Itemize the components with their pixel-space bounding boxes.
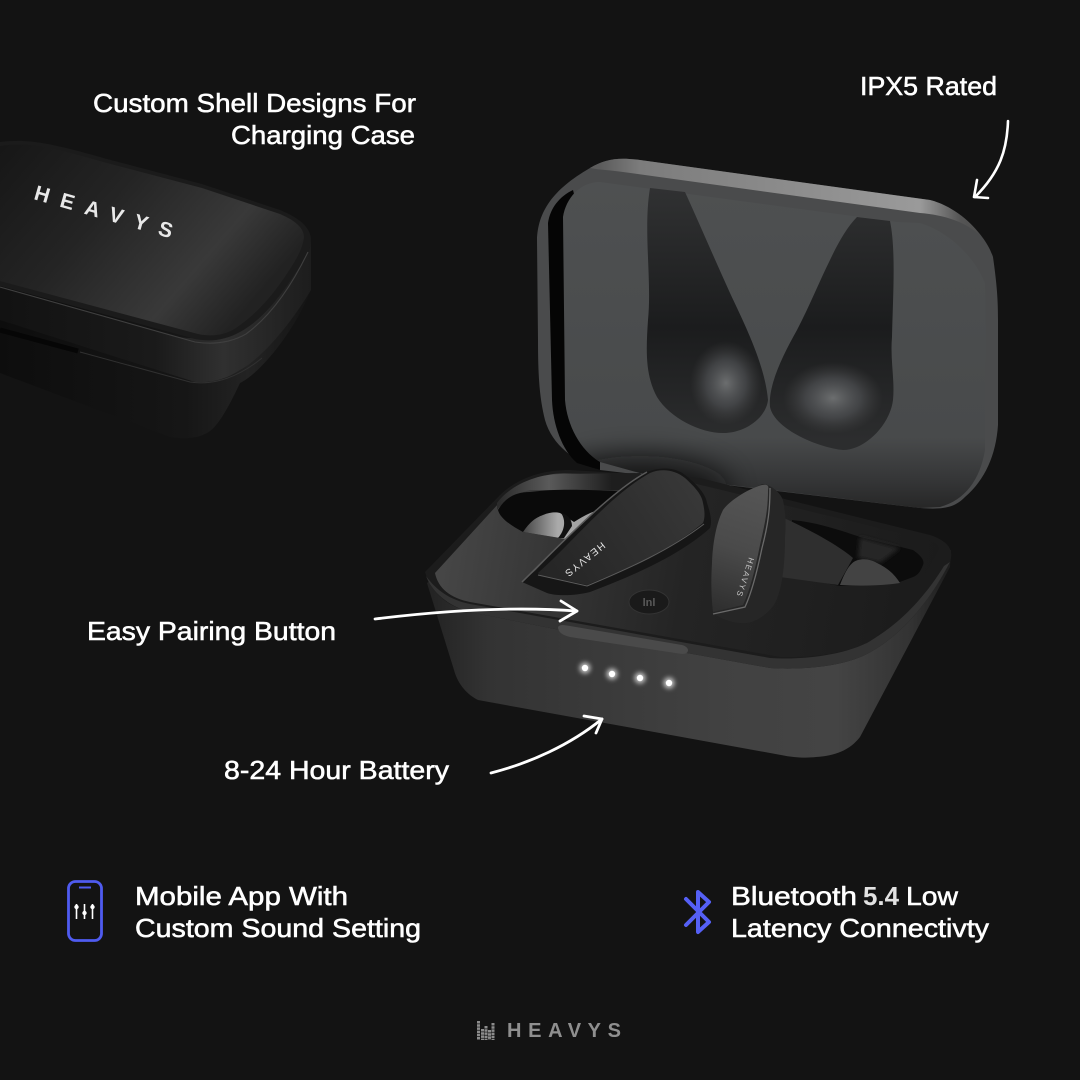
- right earbud well: [780, 518, 923, 586]
- arrow: easy pairing: [375, 601, 577, 621]
- lid lower shadow: [586, 442, 736, 486]
- text: mobile app: [135, 881, 421, 943]
- product: closed charging case: [0, 141, 311, 438]
- icon: pairing button: [629, 590, 669, 614]
- earbud right: [711, 484, 786, 623]
- icon: earbud recess left: [646, 188, 768, 433]
- product: open charging base: [425, 469, 951, 758]
- text: battery: 8-24 Hour Battery: [224, 755, 449, 785]
- arrow: IPX5: [974, 121, 1008, 198]
- left earbud well: [498, 490, 640, 540]
- footer logo: HEAVYS: [507, 1020, 621, 1042]
- product: open lid: [537, 159, 998, 524]
- icon: mobile app: [68, 882, 102, 940]
- text: easy pairing: Easy Pairing Button: [87, 616, 336, 646]
- icon: pairing button: lnl: [643, 597, 655, 609]
- icon: bluetooth: [686, 892, 709, 932]
- text: case logo: HEAVYS: [32, 182, 175, 243]
- text: bluetooth: [731, 881, 989, 943]
- text: mobile app: Custom Sound Setting: [135, 913, 421, 943]
- text: bluetooth: Bluetooth: [731, 881, 857, 911]
- lid inner face: [563, 182, 986, 508]
- text: IPX5 rated: IPX5 Rated: [860, 71, 997, 101]
- text: earbud logo: HEAVYS: [562, 539, 607, 578]
- base top surface: [435, 473, 939, 657]
- text: bluetooth: Latency Connectivty: [731, 913, 989, 943]
- LED battery indicators: [580, 662, 674, 688]
- base front highlight: [558, 625, 688, 654]
- earbud left: [522, 469, 711, 595]
- text: custom shell designs: Custom Shell Designs For: [93, 88, 416, 118]
- text: earbud logo: HEAVYS: [735, 556, 756, 597]
- text: custom shell designs: [93, 88, 416, 150]
- icon: earbud recess right: [770, 217, 894, 450]
- text: custom shell designs: Charging Case: [231, 120, 415, 150]
- text: bluetooth: 5.4: [863, 881, 900, 911]
- arrow: battery: [491, 716, 602, 773]
- text: mobile app: Mobile App With: [135, 881, 348, 911]
- text: bluetooth: Low: [906, 881, 958, 911]
